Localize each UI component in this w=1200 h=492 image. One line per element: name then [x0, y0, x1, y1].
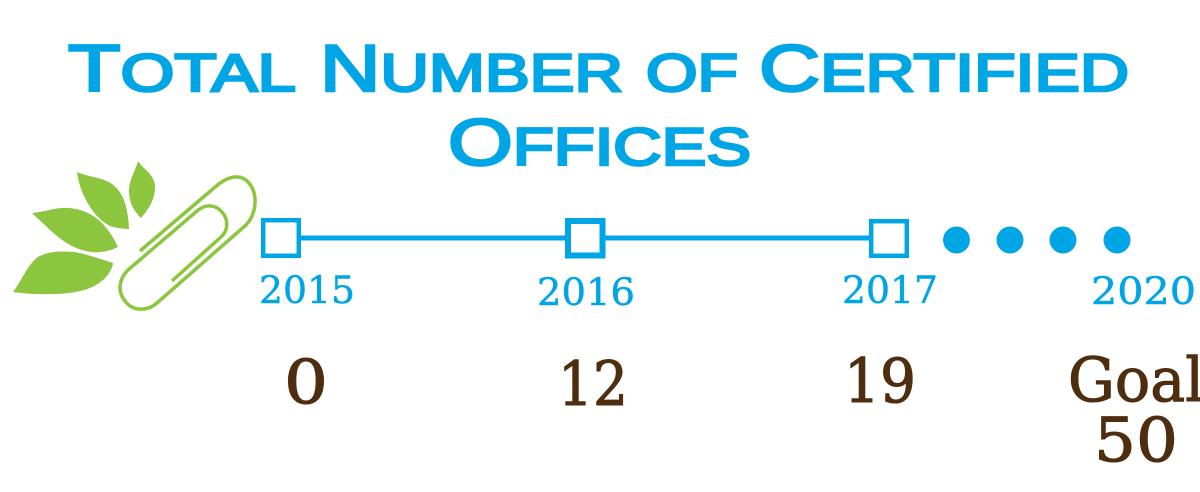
year labels: 2015	[259, 269, 355, 312]
values: 50	[1094, 405, 1178, 476]
icon: paperclip	[120, 177, 255, 309]
year labels: 2016	[537, 271, 635, 314]
dots	[943, 226, 1130, 254]
marker: 2017	[871, 221, 907, 256]
values: 19	[844, 346, 916, 417]
year labels: 2020	[1091, 270, 1196, 313]
timeline	[263, 220, 1130, 256]
values: 12	[558, 349, 628, 420]
icon: leaves	[13, 161, 155, 294]
title	[68, 31, 1129, 179]
marker: 2015	[263, 220, 299, 256]
year labels	[259, 269, 1196, 314]
title: NUMBER	[320, 31, 623, 105]
title: TOTAL	[68, 31, 296, 105]
year labels: 2017	[842, 269, 938, 312]
title: C ERTIFIED	[759, 31, 1129, 105]
title: O FFICES	[448, 105, 751, 179]
values	[284, 345, 1200, 476]
connector line	[301, 236, 869, 240]
marker: 2016	[568, 221, 602, 256]
icon: green leaves and paperclip	[13, 161, 255, 309]
values: 0	[284, 347, 328, 418]
title: OF	[646, 44, 738, 103]
